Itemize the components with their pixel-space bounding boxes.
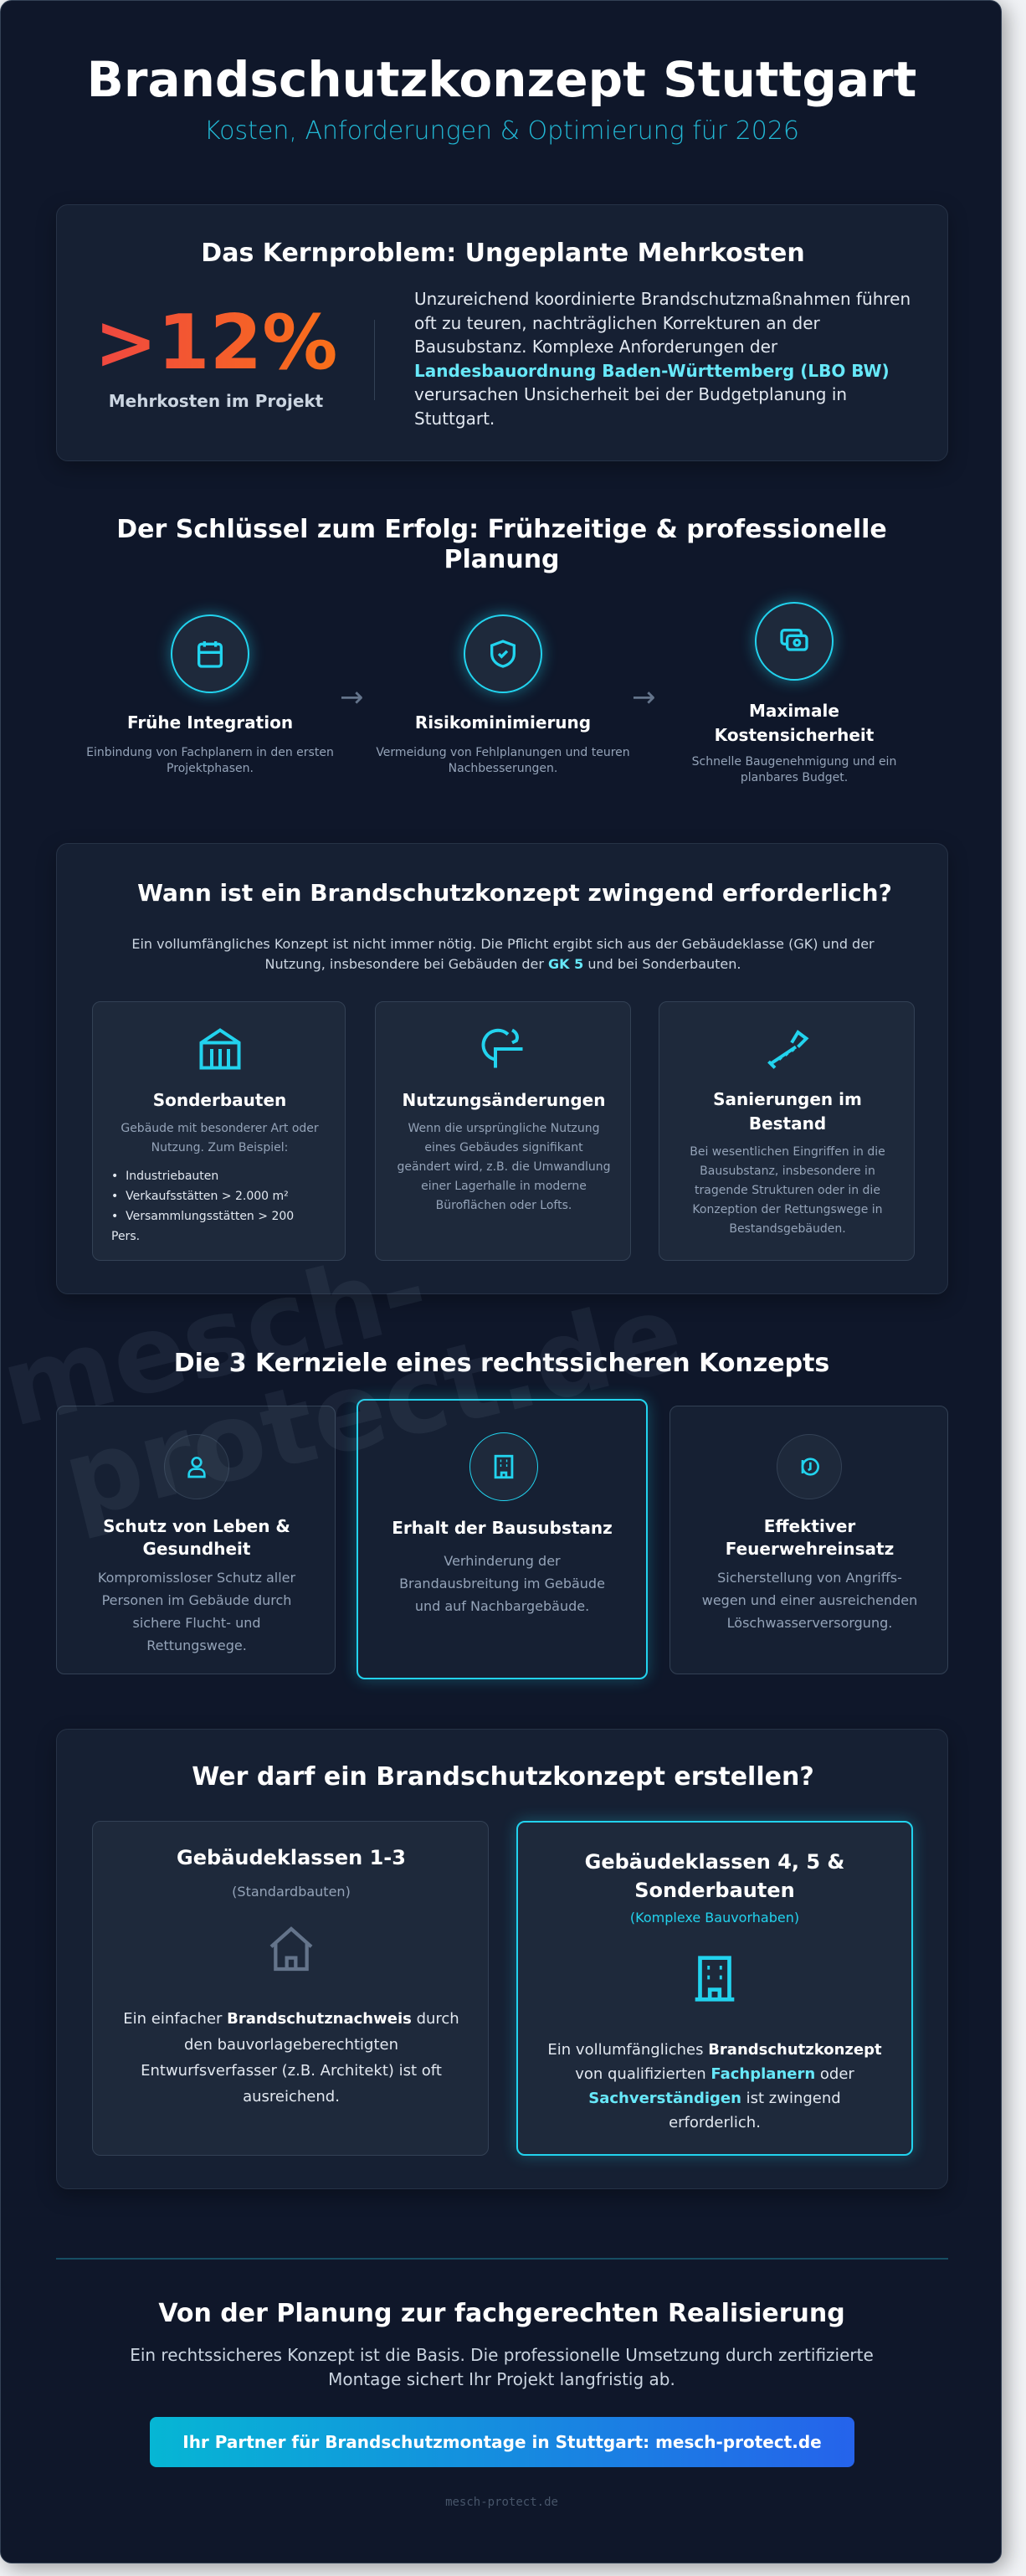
card: GK 1-3: Ein einfacher Brandschutznachweis durch den bauvorlageberechtigten Entwurfsverfasser (z.B. Architekt) ist oft ausreichend. xyxy=(123,2010,459,2106)
icon: calendar xyxy=(171,614,249,693)
footer: mesch-protect.de xyxy=(445,2496,558,2509)
card: Sonderbauten: Sonderbauten xyxy=(153,1090,286,1110)
card: Schutz von Leben: Schutz von Leben & Gesundheit xyxy=(103,1516,290,1559)
button: CTA: Ihr Partner für Brandschutzmontage in Stuttgart: mesch-protect.de xyxy=(182,2432,822,2452)
step 1: Frühe Integration xyxy=(127,712,293,733)
card: Sonderbauten xyxy=(92,1001,346,1261)
icon: shield xyxy=(464,614,542,693)
bullet list xyxy=(111,1170,294,1243)
card: Sanierungen: Sanierungen im Bestand xyxy=(713,1089,862,1134)
watermark: protect.de xyxy=(52,1270,695,1544)
card: Erhalt der Bausubstanz (highlight): Verhinderung der Brandausbreitung im Gebäude und auf Nachbargebäude. xyxy=(399,1553,605,1614)
button: CTA xyxy=(150,2417,854,2467)
icon: money xyxy=(755,602,834,681)
card: Feuerwehreinsatz: Sicherstellung von Angriffs-wegen und einer ausreichenden Löschwasserversorgung. xyxy=(702,1570,917,1631)
card: GK 1-3: (Standardbauten) xyxy=(232,1884,351,1900)
card: Erhalt der Bausubstanz (highlight): Erhalt der Bausubstanz xyxy=(392,1518,613,1538)
text: closing: Ein rechtssicheres Konzept ist die Basis. Die professionelle Umsetzung durch zertifizierte Montage sichert Ihr Projekt langfristig ab. xyxy=(130,2345,874,2389)
card: GK 4,5: Ein vollumfängliches Brandschutzkonzept von qualifizierten Fachplanern oder Sachverständigen ist zwingend erforderlich. xyxy=(547,2041,882,2131)
step 2: Risikominimierung xyxy=(415,712,591,733)
stat: >12%: >12% xyxy=(95,299,337,387)
icon: fire hose xyxy=(777,1434,842,1499)
heading: Realisierung: Von der Planung zur fachgerechten Realisierung xyxy=(158,2299,845,2328)
icon: office building xyxy=(695,1956,735,2002)
heading: Schlüssel zum Erfolg: Der Schlüssel zum Erfolg: Frühzeitige & professionelle Planung xyxy=(116,515,887,574)
card: GK 4,5: (Komplexe Bauvorhaben) xyxy=(630,1910,799,1926)
subtitle: Kosten, Anforderungen & Optimierung für 2026 xyxy=(204,116,799,146)
card: Erhalt der Bausubstanz (highlight) xyxy=(357,1399,648,1679)
stat label: Mehrkosten im Projekt xyxy=(109,391,323,411)
card: Schutz von Leben xyxy=(56,1406,336,1674)
bullet list: Pers. xyxy=(111,1230,140,1243)
card: Feuerwehreinsatz: Effektiver Feuerwehreinsatz xyxy=(726,1516,894,1559)
icon: building xyxy=(469,1432,538,1501)
bullet list: • Verkaufsstätten > 2.000 m² xyxy=(111,1190,289,1203)
text: description: Unzureichend koordinierte Brandschutzmaßnahmen führen oft zu teuren, nachträglichen Korrekturen an der Bausubstanz. Komplexe Anforderungen der Landesbauordnung Baden-Württemberg (LBO BW) verursachen Unsicherheit bei der Budgetplanung in Stuttgart. xyxy=(414,289,911,429)
step 3 xyxy=(692,593,896,784)
heading: Das Kernproblem: Ungeplante Mehrkosten xyxy=(201,239,805,268)
title: Brandschutzkonzept Stuttgart xyxy=(87,51,916,108)
bullet list: • Industriebauten xyxy=(111,1170,218,1183)
bullet list: • Versammlungsstätten > 200 xyxy=(111,1210,294,1223)
step 3: Maximale Kostensicherheit xyxy=(715,701,874,745)
card: GK 4,5 xyxy=(516,1821,913,2156)
card: Schutz von Leben: Kompromissloser Schutz aller Personen im Gebäude durch sichere Flucht- und Rettungswege. xyxy=(98,1570,295,1653)
card: Sanierungen: Bei wesentlichen Eingriffen in die Bausubstanz, insbesondere in tragende Strukturen oder in die Konzeption der Rettungswege in Bestandsgebäuden. xyxy=(690,1145,885,1236)
panel: Kernproblem xyxy=(56,204,948,461)
card: GK 1-3 xyxy=(92,1821,489,2156)
icon: house xyxy=(269,1926,313,1971)
icon: building columns xyxy=(199,1028,241,1070)
card: GK 1-3: Gebäudeklassen 1-3 xyxy=(177,1846,406,1869)
card: GK 4,5: Gebäudeklassen 4, 5 & Sonderbauten xyxy=(585,1850,844,1902)
icon: person xyxy=(164,1434,229,1499)
card: Nutzungsänderungen: Wenn die ursprüngliche Nutzung eines Gebäudes signifikant geändert wird, z.B. die Umwandlung einer Lagerhalle in moderne Büroflächen oder Lofts. xyxy=(397,1122,611,1212)
watermark: mesch- xyxy=(0,1226,439,1452)
heading: Kernziele: Die 3 Kernziele eines rechtssicheren Konzepts xyxy=(174,1349,829,1378)
step 1 xyxy=(86,606,334,775)
card: Feuerwehreinsatz xyxy=(669,1406,948,1674)
icon: tool xyxy=(767,1030,808,1069)
icon: change xyxy=(482,1028,522,1068)
panel: Wer darf erstellen xyxy=(56,1729,948,2189)
step 2 xyxy=(376,606,630,775)
card: Sonderbauten: Gebäude mit besonderer Art oder Nutzung. Zum Beispiel: xyxy=(121,1122,319,1154)
step 3: Schnelle Baugenehmigung und ein planbares Budget. xyxy=(692,755,896,784)
card: Sanierungen xyxy=(659,1001,915,1261)
heading: Wer darf ein Brandschutzkonzept erstellen? xyxy=(192,1762,814,1792)
arrow: → xyxy=(632,681,656,714)
step 2: Vermeidung von Fehlplanungen und teuren Nachbesserungen. xyxy=(376,746,630,775)
panel: Wann erforderlich xyxy=(56,843,948,1294)
card: Nutzungsänderungen: Nutzungsänderungen xyxy=(403,1090,605,1110)
card: Nutzungsänderungen xyxy=(375,1001,631,1261)
heading: Wann ist ein Brandschutzkonzept zwingend erforderlich? xyxy=(137,879,892,907)
arrow: → xyxy=(340,681,363,714)
step 1: Einbindung von Fachplanern in den ersten Projektphasen. xyxy=(86,746,334,775)
intro text: Ein vollumfängliches Konzept ist nicht immer nötig. Die Pflicht ergibt sich aus der Gebäudeklasse (GK) und der Nutzung, insbesondere bei Gebäuden der GK 5 und bei Sonderbauten. xyxy=(131,936,875,972)
